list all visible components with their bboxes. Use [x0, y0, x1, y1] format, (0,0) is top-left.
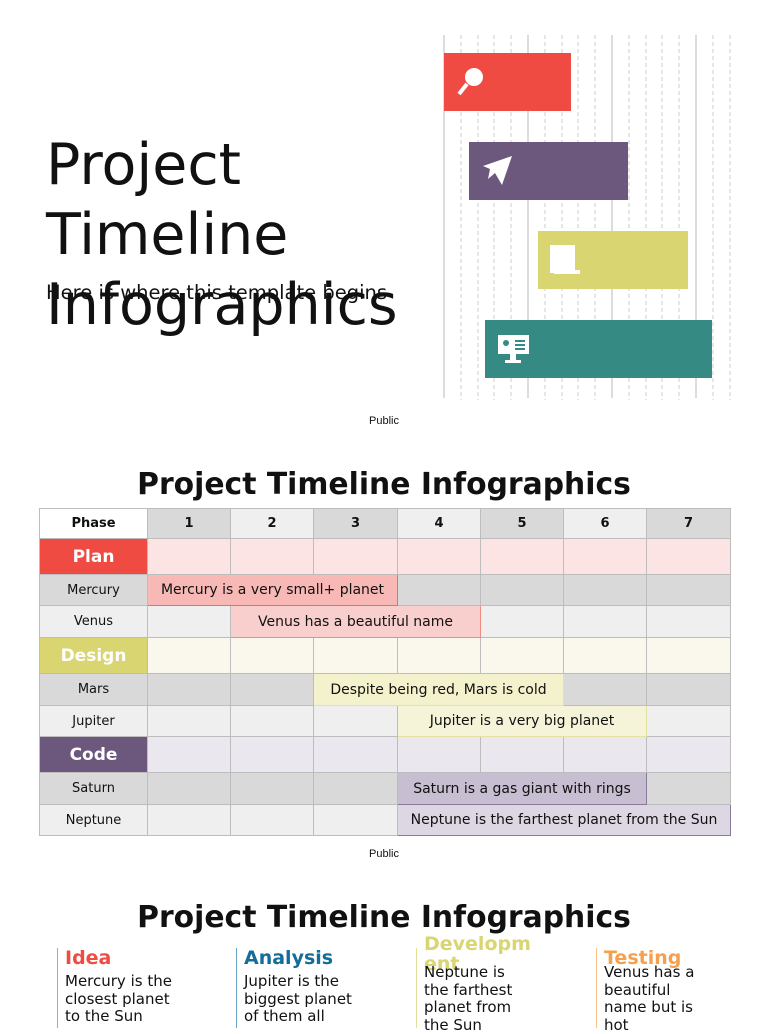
subtitle: Here is where this template begins	[46, 281, 387, 304]
phase: idea: Mercury is the closest planet to the Sun	[65, 972, 172, 1025]
timeline table: Neptune is the farthest planet from the Sun	[411, 812, 717, 828]
title: Project	[46, 132, 241, 198]
phase: idea: Idea	[65, 947, 111, 969]
bar: monitor	[485, 320, 712, 378]
timeline table: Jupiter is a very big planet	[430, 713, 614, 729]
timeline table: 3	[351, 516, 360, 531]
timeline table: 2	[267, 516, 277, 531]
timeline table: Neptune	[66, 812, 121, 828]
timeline table: Design	[61, 646, 126, 666]
timeline table: Saturn is a gas giant with rings	[413, 780, 631, 796]
timeline table: 4	[434, 516, 444, 531]
heading: phases: Project Timeline Infographics	[137, 900, 631, 935]
phase: testing: Venus has a beautiful name but is hot	[604, 963, 694, 1034]
bar: research	[444, 53, 571, 111]
timeline table: Mercury	[67, 582, 120, 598]
timeline table: Venus	[74, 614, 113, 629]
public label: Public	[369, 415, 399, 427]
phase: analysis	[236, 948, 361, 1028]
timeline table: Phase	[71, 516, 116, 531]
timeline table: Saturn	[72, 781, 115, 796]
timeline table: Plan	[73, 546, 114, 566]
public label 2: Public	[369, 848, 399, 860]
phase: analysis: Jupiter is the biggest planet of them all	[244, 972, 352, 1025]
text: Developm	[424, 933, 531, 955]
heading: table: Project Timeline Infographics	[137, 467, 631, 502]
timeline table: 7	[684, 516, 693, 531]
phase: development: ent	[424, 953, 460, 975]
gantt chart	[443, 35, 730, 400]
timeline table: Jupiter	[72, 714, 115, 728]
timeline table	[39, 508, 731, 836]
title	[46, 132, 398, 338]
phase: testing	[596, 948, 706, 1028]
phase: idea	[57, 948, 179, 1028]
timeline table: 5	[517, 516, 527, 531]
timeline table: 1	[184, 516, 194, 531]
timeline table: Venus has a beautiful name	[258, 614, 453, 630]
timeline table: Code	[70, 744, 117, 764]
phase: development	[416, 948, 526, 1028]
timeline table: Mercury is a very small+ planet	[161, 582, 384, 598]
timeline table: Mars	[78, 682, 109, 697]
phase: development: Neptune is the farthest planet from the Sun	[424, 963, 512, 1034]
bar: document	[538, 231, 688, 289]
phase: analysis: Analysis	[244, 947, 333, 969]
timeline table: Despite being red, Mars is cold	[330, 682, 547, 698]
phase: testing: Testing	[604, 947, 681, 969]
bar: send	[469, 142, 628, 200]
title: Infographics	[46, 272, 398, 338]
timeline table: 6	[600, 516, 610, 531]
title: Timeline	[46, 202, 288, 268]
